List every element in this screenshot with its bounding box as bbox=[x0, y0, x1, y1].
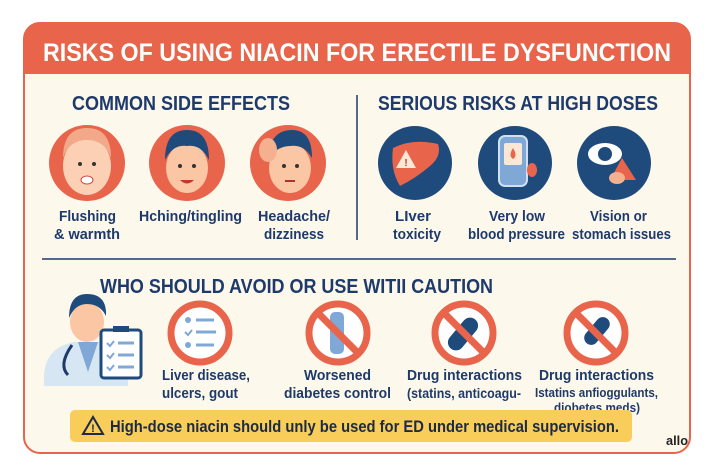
icon: no pill bbox=[435, 304, 493, 362]
icon: checklist circle bbox=[171, 304, 229, 362]
icon: blood pressure monitor bbox=[478, 126, 552, 200]
label: drug interactions 2: diobetes meds) bbox=[554, 400, 640, 415]
label: drug interactions 2: Drug interactions bbox=[539, 367, 654, 384]
logo: allo: allo bbox=[666, 433, 688, 448]
icon: no pill 2 bbox=[567, 304, 625, 362]
callout: warning bar: High-dose niacin should unly be used for ED under medical supervision. bbox=[110, 417, 619, 436]
icon: eye with warning bbox=[577, 126, 651, 200]
label: flushing: & warmth bbox=[54, 226, 120, 243]
label: headache: dizziness bbox=[264, 226, 324, 243]
heading: who should avoid: WHO SHOULD AVOID OR USE WITII CAUTION bbox=[100, 276, 493, 298]
label: vision: Vision or bbox=[590, 208, 647, 225]
label: vision: stomach issues bbox=[572, 226, 671, 243]
label: liver disease: ulcers, gout bbox=[162, 385, 238, 402]
label: headache: Headache/ bbox=[258, 208, 331, 225]
heading: common side effects: COMMON SIDE EFFECTS bbox=[72, 93, 290, 115]
callout: warning bar: ! bbox=[91, 423, 95, 435]
icon: headache face bbox=[250, 125, 326, 201]
icon: doctor with clipboard bbox=[44, 294, 141, 386]
icon: no diabetes bbox=[309, 304, 367, 362]
label: diabetes: Worsened bbox=[304, 367, 371, 384]
title banner bbox=[24, 23, 690, 74]
label: flushing: Flushing bbox=[59, 208, 116, 225]
label: drug interactions 1: Drug interactions bbox=[407, 367, 522, 384]
heading: serious risks: SERIOUS RISKS AT HIGH DOSES bbox=[378, 93, 658, 115]
icon: itching face bbox=[149, 125, 225, 201]
label: liver: LIver bbox=[395, 208, 431, 225]
label: liver disease: Liver disease, bbox=[162, 367, 250, 384]
label: liver: toxicity bbox=[393, 226, 442, 243]
callout: warning bar bbox=[70, 410, 632, 442]
panel: common side effects bbox=[49, 125, 331, 243]
label: drug interactions 2: Istatins anfioggulants, bbox=[535, 385, 658, 400]
panel: serious risks bbox=[378, 126, 671, 243]
title: RISKS OF USING NIACIN FOR ERECTILE DYSFUNCTION bbox=[43, 39, 671, 67]
label: blood pressure: Very low bbox=[489, 208, 545, 225]
label: blood pressure: blood pressure bbox=[468, 226, 565, 243]
label: drug interactions 1: (statins, anticoagu- bbox=[407, 385, 521, 401]
label: diabetes: diabetes control bbox=[284, 385, 391, 402]
icon: liver bbox=[378, 126, 452, 200]
icon: flushing face bbox=[49, 125, 125, 201]
label: itching: Hching/tingling bbox=[139, 208, 242, 225]
icon: liver: ! bbox=[404, 158, 408, 169]
